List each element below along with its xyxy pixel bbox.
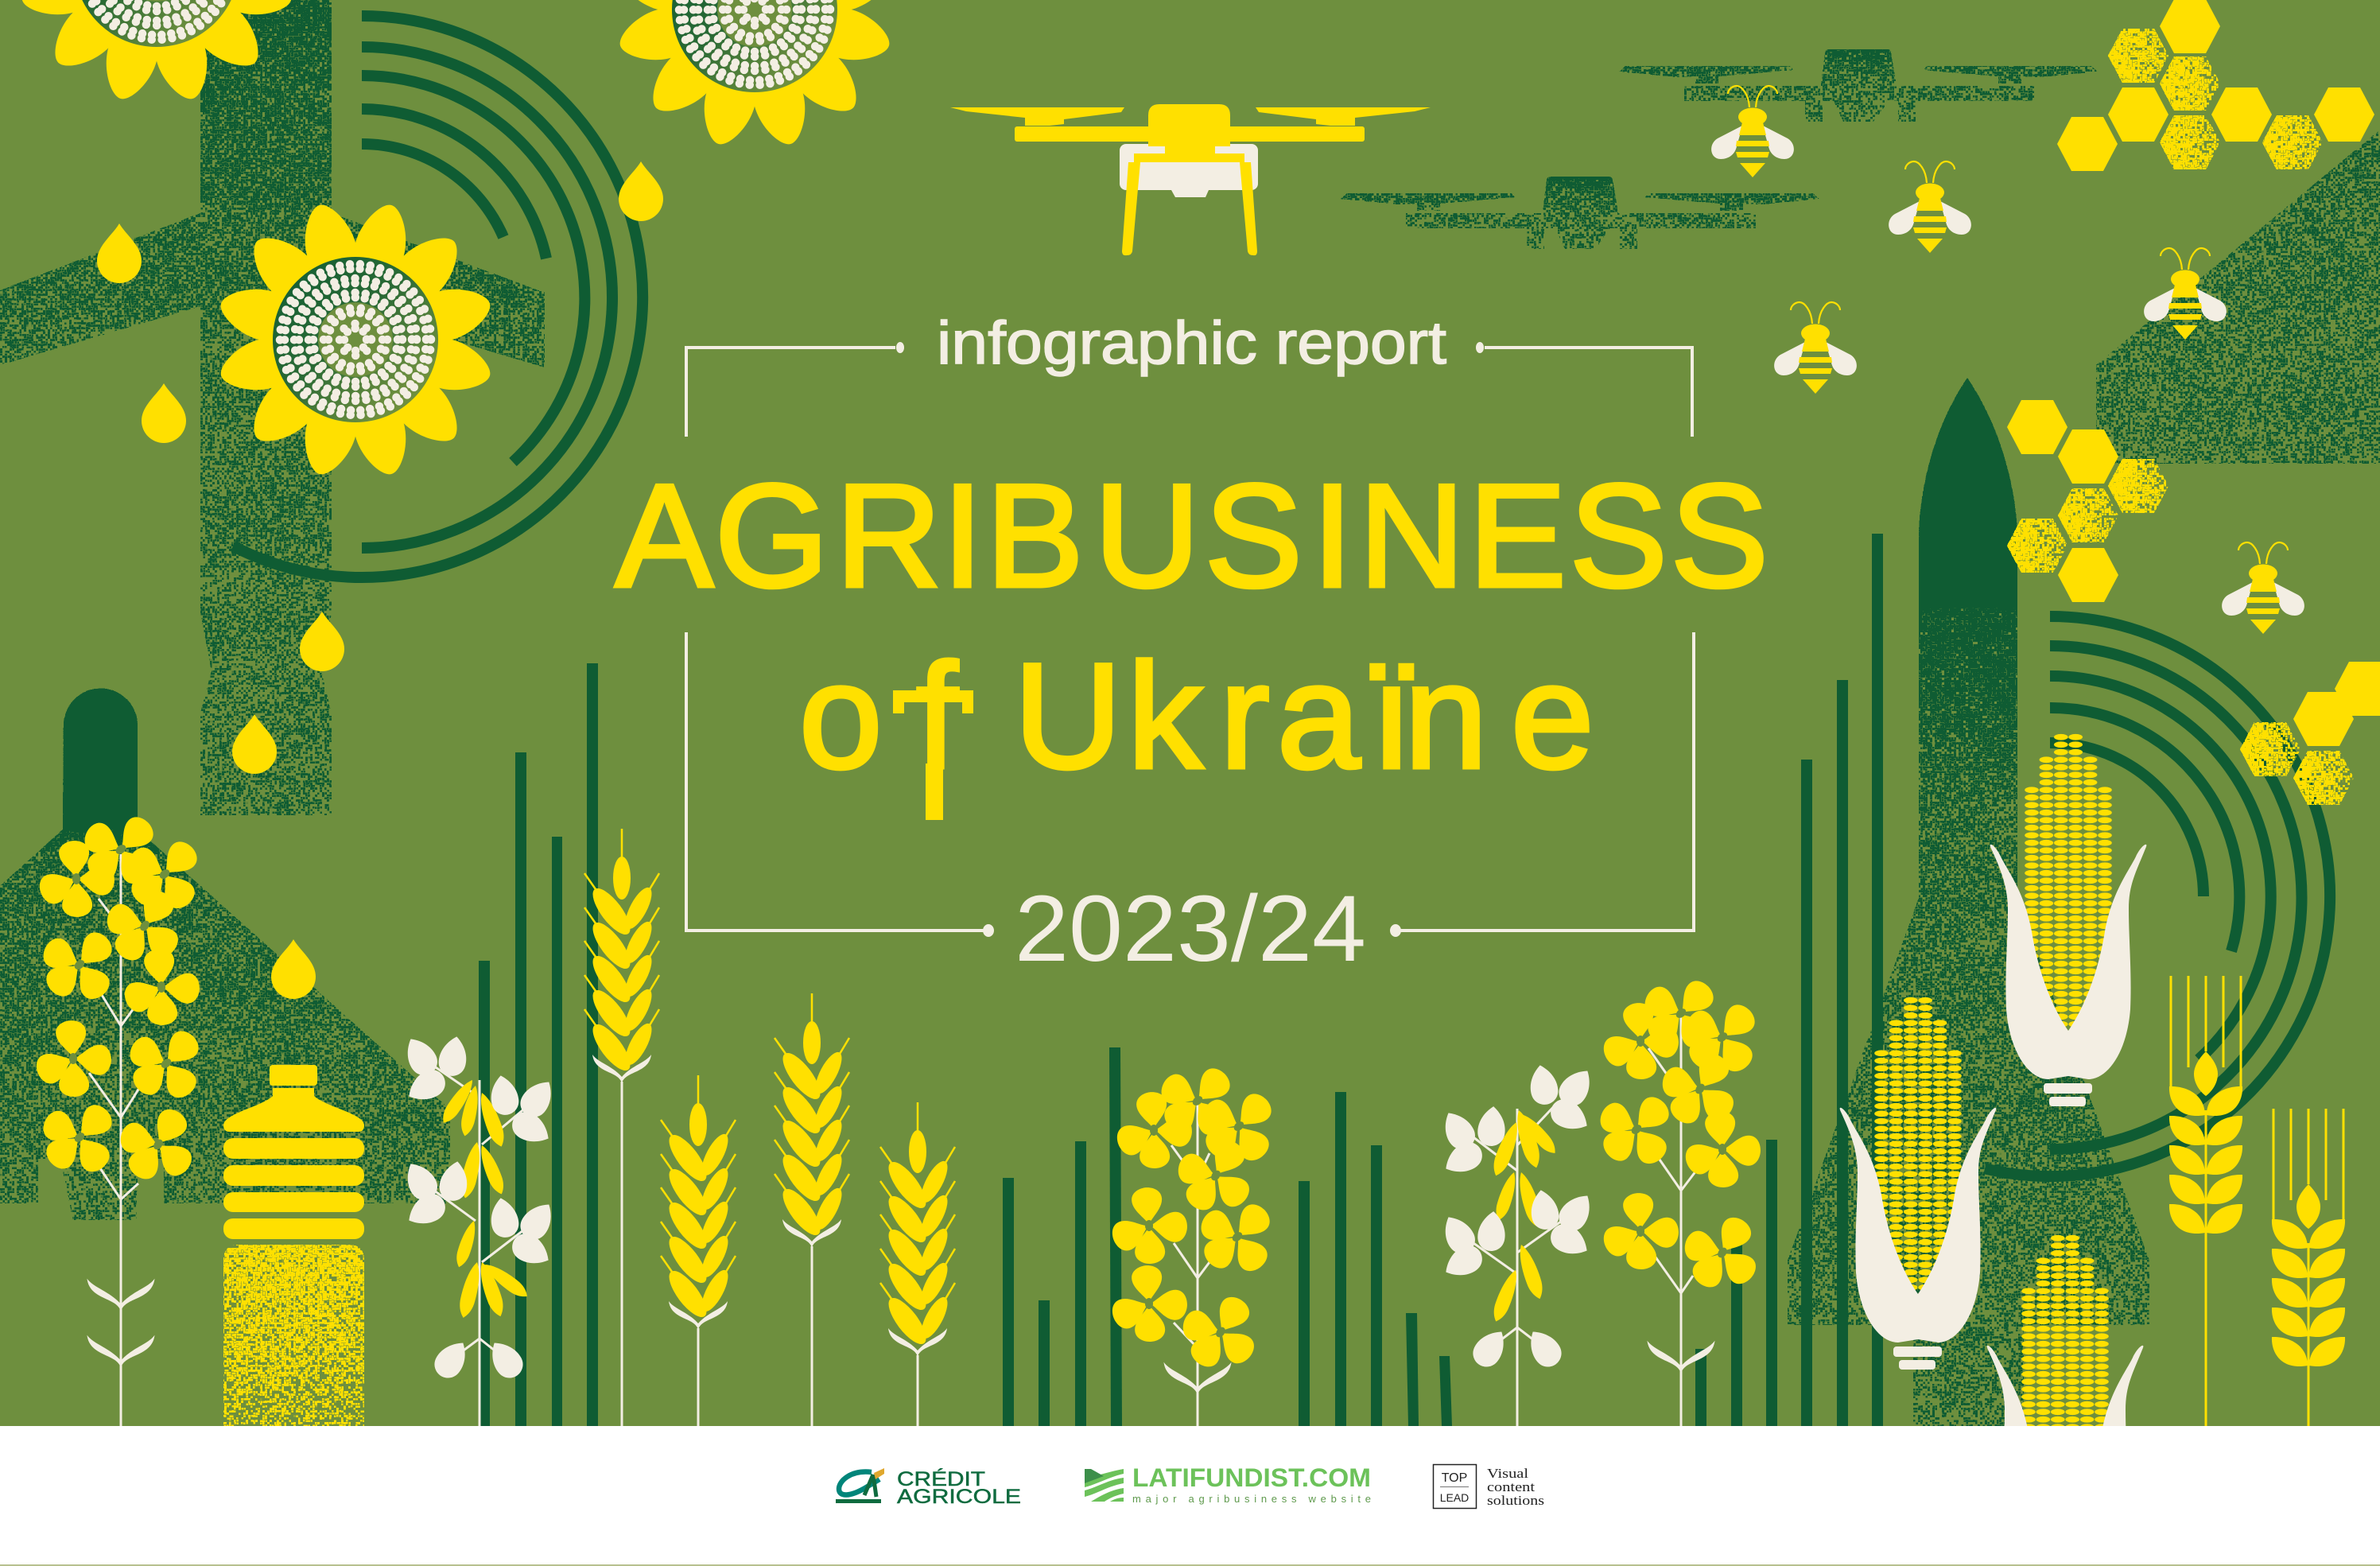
logo: Latifundist: major agribusiness website <box>1132 1493 1371 1505</box>
solid honeycomb cells <box>2007 0 2380 746</box>
sunflower main <box>215 199 496 480</box>
logo: Top Lead: LEAD <box>1440 1491 1469 1504</box>
yellow wheat right, taller <box>2169 976 2242 1436</box>
logo: Top Lead: Visual <box>1487 1466 1528 1481</box>
stippled bullet stem and flare, right <box>1788 378 2149 1426</box>
title frame <box>686 342 1694 937</box>
dark drone lower <box>1341 177 1819 249</box>
logo: Top Lead: TOP <box>1442 1471 1467 1485</box>
oil drops <box>97 161 663 999</box>
logo: Credit Agricole: CRÉDIT <box>897 1467 985 1490</box>
soy plant left <box>399 1032 560 1426</box>
logo: Top Lead <box>1433 1465 1544 1508</box>
logo: Latifundist <box>1085 1463 1371 1505</box>
logo: Credit Agricole <box>836 1467 1021 1508</box>
dark drone upper <box>1619 49 2098 122</box>
canola plant right <box>1586 976 1777 1426</box>
subtitle: infographic report <box>937 309 1446 377</box>
year: 2023/24 <box>1015 876 1366 981</box>
title line 1: AGRIBUSINESS <box>615 453 1768 617</box>
stippled roof shape, upper right <box>2096 130 2380 464</box>
bees <box>1711 86 2304 634</box>
concentric arcs, left <box>233 16 643 577</box>
logo: Credit Agricole: AGRICOLE <box>897 1486 1021 1508</box>
canola plant middle <box>1094 1063 1276 1426</box>
bottle body stipple <box>223 1245 364 1426</box>
corn left <box>1840 997 1996 1370</box>
footer band <box>0 1426 2380 1566</box>
stippled tree stem and branches, left <box>0 0 545 815</box>
oil bottle <box>223 1065 364 1239</box>
corn top <box>1990 733 2146 1106</box>
drone yellow <box>950 104 1431 255</box>
wheat stalks centre left <box>584 829 955 1426</box>
stippled yellow elements <box>223 29 2354 1426</box>
corn bottom <box>1987 1234 2143 1566</box>
logo: Latifundist: LATIFUNDIST.COM <box>1132 1463 1371 1492</box>
logo: Top Lead: content <box>1487 1479 1535 1494</box>
sunflower top left <box>16 0 297 105</box>
logo: Top Lead: solutions <box>1487 1493 1544 1508</box>
yellow wheat right, shorter <box>2272 1109 2345 1566</box>
concentric arcs, right <box>1985 616 2330 1176</box>
soy plant right <box>1437 1063 1598 1426</box>
sunflower top centre <box>614 0 895 150</box>
title line 2: of Ukraïne <box>799 632 1594 799</box>
canola plant left <box>18 812 216 1426</box>
stippled house shape, lower left <box>0 689 450 1220</box>
stippled honeycomb cells <box>2007 29 2354 805</box>
vertical green bars <box>479 534 1883 1426</box>
